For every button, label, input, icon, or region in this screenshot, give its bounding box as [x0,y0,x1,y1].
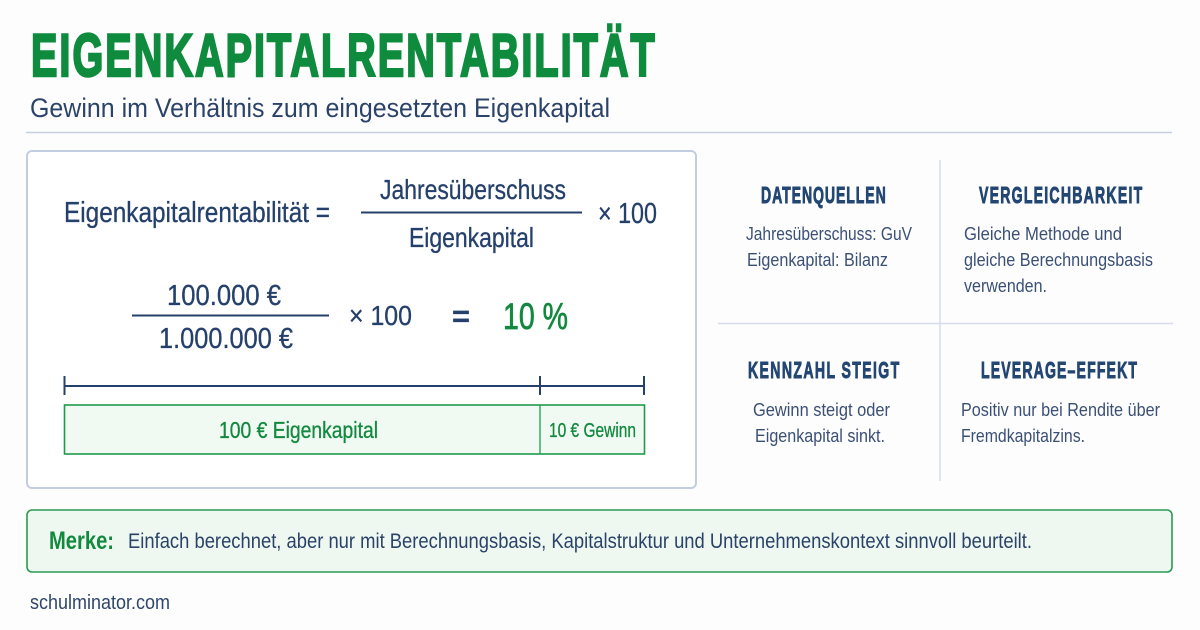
panel: Datenquellen [746,182,913,270]
bar: capital and profit: 10 € Gewinn [549,420,636,442]
subtitle: Gewinn im Verhältnis zum eingesetzten Eigenkapital [30,93,610,123]
worked example: 10 % [503,296,568,337]
callout: Merke [27,510,1172,572]
general formula: Eigenkapitalrentabilität = [64,197,330,229]
footer source: schulminator.com [30,592,170,614]
panel: Vergleichbarkeit: gleiche Berechnungsbasis [964,249,1153,270]
worked example: = [452,300,470,333]
panel: Datenquellen: Eigenkapital: Bilanz [747,249,888,270]
panel: Datenquellen: DATENQUELLEN [761,182,886,209]
panel: Vergleichbarkeit: VERGLEICHBARKEIT [979,182,1142,209]
panel: Vergleichbarkeit: verwenden. [964,275,1047,296]
panel: Kennzahl steigt: Gewinn steigt oder [753,399,890,420]
panel: Leverage-Effekt: LEVERAGE–EFFEKT [981,357,1137,384]
panel: Leverage-Effekt [961,357,1160,446]
general formula [64,174,657,253]
general formula: Jahresüberschuss [380,174,566,205]
panel: Kennzahl steigt: Eigenkapital sinkt. [755,425,885,446]
title: EIGENKAPITALRENTABILITÄT [31,22,655,89]
callout: Merke: Einfach berechnet, aber nur mit Berechnungsbasis, Kapitalstruktur und Unternehmenskontext sinnvoll beurteilt. [128,530,1032,553]
bracket scale [64,376,644,395]
general formula: Eigenkapital [409,222,534,253]
worked example: 100.000 € [167,280,281,312]
panel: formula and example [27,151,696,488]
panel: Leverage-Effekt: Positiv nur bei Rendite über [961,399,1160,420]
bar: capital and profit: 100 € Eigenkapital [219,417,378,443]
worked example [132,280,568,355]
worked example: × 100 [349,300,412,331]
panel: Leverage-Effekt: Fremdkapitalzins. [961,425,1085,446]
panel: Vergleichbarkeit [964,182,1153,296]
panel: Vergleichbarkeit: Gleiche Methode und [964,223,1122,244]
callout: Merke: Merke: [49,527,114,555]
worked example: 1.000.000 € [159,323,293,355]
panel: Datenquellen: Jahresüberschuss: GuV [746,223,913,244]
general formula: × 100 [598,198,657,230]
panel: Kennzahl steigt [748,357,899,446]
bar: capital and profit [64,405,644,454]
panel: Kennzahl steigt: KENNZAHL STEIGT [748,357,899,384]
